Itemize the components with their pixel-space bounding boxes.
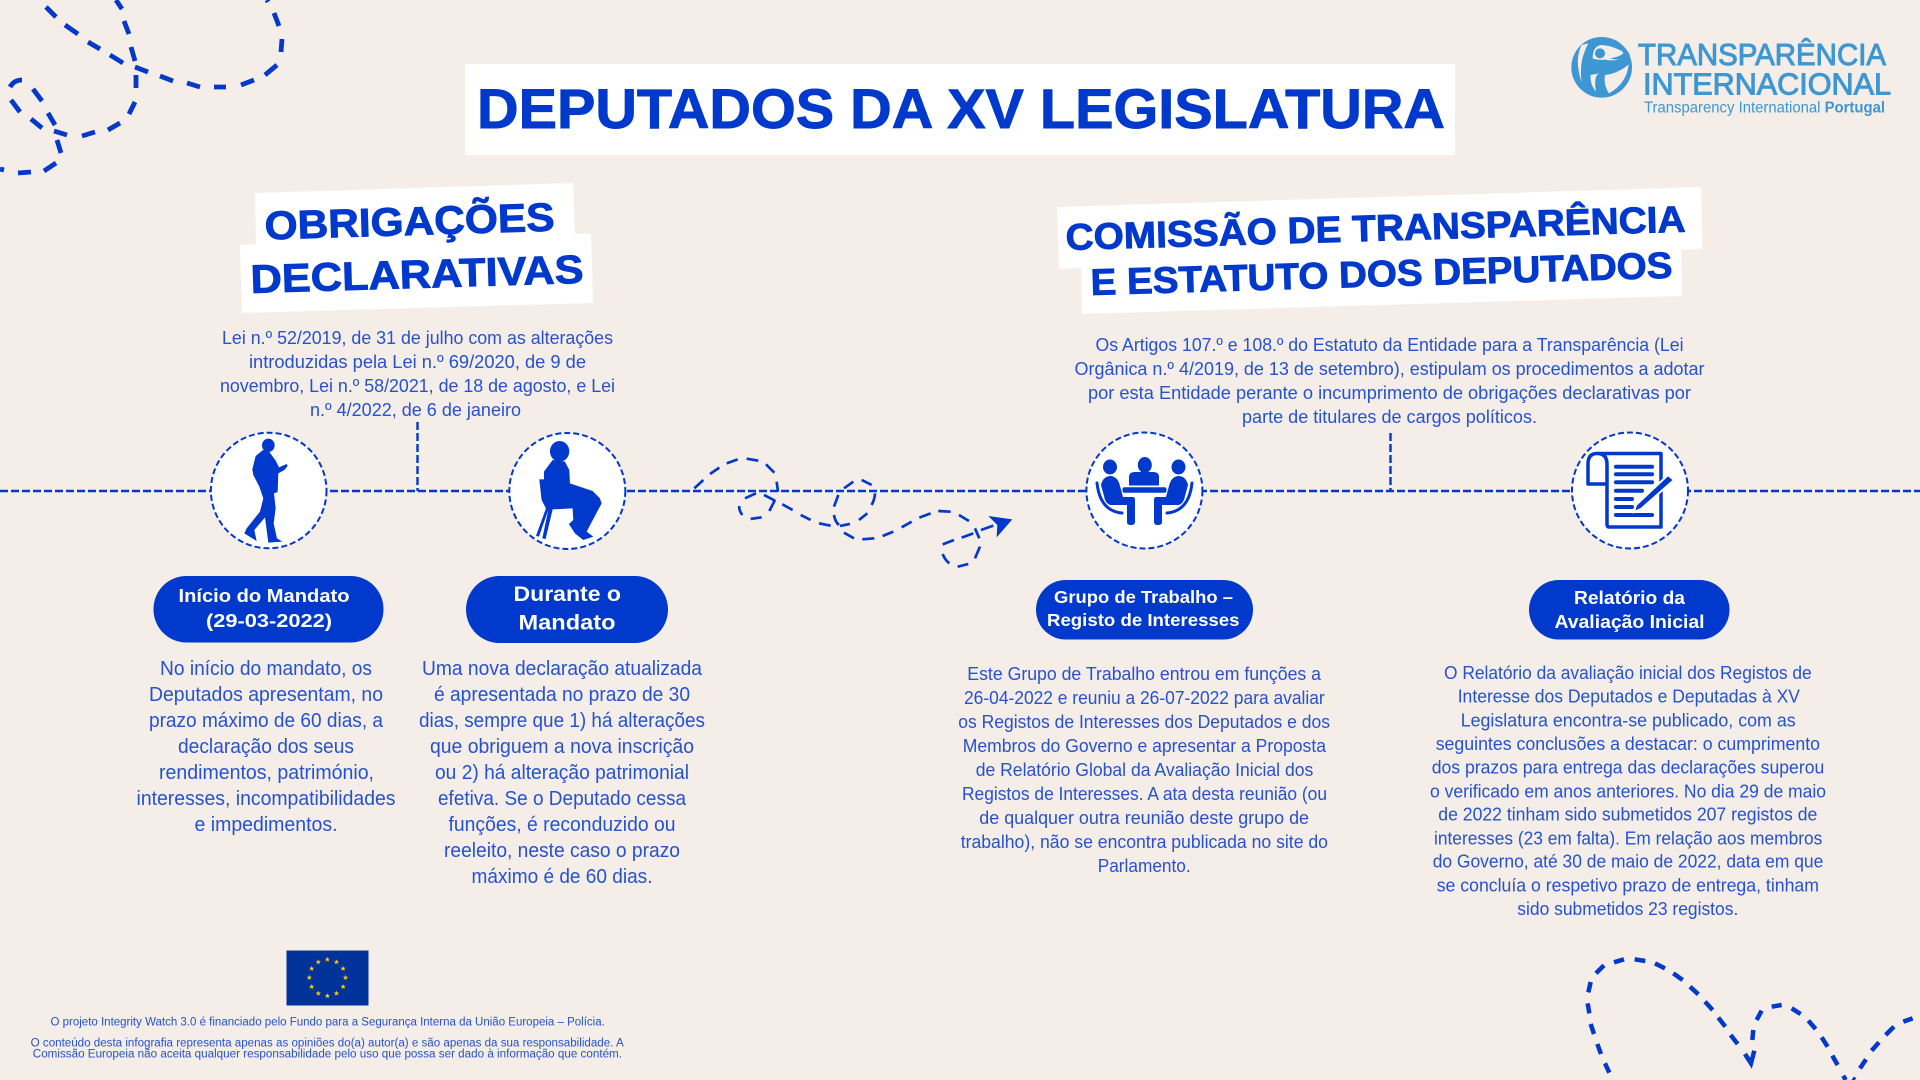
text: relatório da avaliação inicial: se concluía o respetivo prazo de entrega, tinham [1437,874,1819,895]
panel: comissão de transparência [958,187,1826,919]
text: grupo de trabalho: 26-04-2022 e reuniu a 26-07-2022 para avaliar [964,687,1325,708]
text: relatório da avaliação inicial: sido submetidos 23 registos. [1517,898,1738,919]
text: durante o mandato: é apresentada no prazo de 30 [434,683,690,706]
text: artigos do estatuto: Orgânica n.º 4/2019, de 13 de setembro), estipulam os procedimentos a adotar [1074,358,1704,379]
logo: Transparência Internacional: INTERNACIONAL [1643,66,1891,102]
text: grupo de trabalho: os Registos de Interesses dos Deputados e dos [958,711,1330,732]
text: relatório da avaliação inicial: interesses (23 em falta). Em relação aos membros [1434,827,1822,848]
text: início do mandato: e impedimentos. [194,813,338,836]
text: grupo de trabalho: Este Grupo de Trabalho entrou em funções a [967,663,1322,684]
label: grupo de trabalho: Registo de Interesses [1047,610,1240,630]
heading: obrigações declarativas: DECLARATIVAS [250,248,584,302]
text: grupo de trabalho: Registos de Interesses. A ata desta reunião (ou [962,783,1327,804]
label: durante o mandato: Mandato [518,610,616,634]
text: durante o mandato: ou 2) há alteração patrimonial [435,761,689,784]
text: grupo de trabalho: de Relatório Global da Avaliação Inicial dos [976,759,1313,780]
label: grupo de trabalho [1036,580,1253,640]
text: início do mandato: Deputados apresentam, no [149,683,383,706]
text: início do mandato: prazo máximo de 60 dias, a [149,709,384,732]
label: durante o mandato [466,576,668,643]
text: relatório da avaliação inicial: de 2022 tinham sido submetidos 207 registos de [1438,804,1817,825]
text: início do mandato: rendimentos, património, [159,761,374,784]
decoration: dashed loops bottom right [1588,959,1913,1080]
text: relatório da avaliação inicial: seguintes conclusões a destacar: o cumprimento [1436,733,1820,754]
title: DEPUTADOS DA XV LEGISLATURA [477,77,1445,140]
label: durante o mandato: Durante o [514,582,621,606]
label: início do mandato: (29-03-2022) [206,610,332,631]
text: artigos do estatuto: Os Artigos 107.º e 108.º do Estatuto da Entidade para a Transparência (Lei [1096,334,1684,355]
decoration: dashed loops top left [0,0,282,173]
text: grupo de trabalho: Parlamento. [1098,855,1191,876]
text: relatório da avaliação inicial: do Governo, até 30 de maio de 2022, data em que [1433,851,1823,872]
heading: comissão de transparência e estatuto dos deputados: COMISSÃO DE TRANSPARÊNCIA [1065,198,1686,258]
text: base legal [220,327,615,420]
timeline: horizontal dashed line and connectors [0,422,1920,491]
text: artigos do estatuto [1074,334,1704,427]
text: grupo de trabalho: Membros do Governo e apresentar a Proposta [963,735,1327,756]
heading: comissão de transparência e estatuto dos deputados: E ESTATUTO DOS DEPUTADOS [1090,245,1673,303]
text: funding disclaimer: O projeto Integrity Watch 3.0 é financiado pelo Fundo para a Segurança Interna da União Europeia – Polícia. [50,1017,605,1029]
label: relatório da avaliação inicial: Relatório da [1574,588,1686,608]
logo: Transparência Internacional [1571,37,1891,117]
text: base legal: novembro, Lei n.º 58/2021, de 18 de agosto, e Lei [220,375,615,396]
text: início do mandato [136,657,396,836]
text: durante o mandato: máximo é de 60 dias. [472,865,652,888]
icon: meeting table in circle [1086,432,1202,548]
logo: Transparência Internacional: Transparency International Portugal [1644,100,1885,116]
text: relatório da avaliação inicial: Interesse dos Deputados e Deputadas à XV [1458,686,1801,707]
title [465,64,1455,155]
text: base legal: introduzidas pela Lei n.º 69/2020, de 9 de [249,351,586,372]
text: durante o mandato: dias, sempre que 1) há alterações [419,709,705,732]
text: funding disclaimer: O conteúdo desta infografia representa apenas as opiniões do(a) autor(a) e são apenas da sua responsabilidade. A [31,1037,624,1049]
text: grupo de trabalho: trabalho), não se encontra publicada no site do [961,831,1328,852]
text: durante o mandato [419,657,705,888]
text: base legal: Lei n.º 52/2019, de 31 de julho com as alterações [222,327,613,348]
text: base legal: n.º 4/2022, de 6 de janeiro [310,399,521,420]
icon: globe with figure [1571,37,1632,98]
text: relatório da avaliação inicial [1430,662,1826,919]
heading: comissão de transparência e estatuto dos deputados [1057,187,1702,314]
heading: obrigações declarativas: OBRIGAÇÕES [264,194,555,248]
arrow: dashed looping arrow [694,459,1012,567]
label: início do mandato [154,576,384,642]
logo: Transparência Internacional: TRANSPARÊNCIA [1638,37,1886,72]
label: relatório da avaliação inicial [1529,580,1730,640]
text: durante o mandato: Uma nova declaração atualizada [422,657,703,680]
text: funding disclaimer: Comissão Europeia não aceita qualquer responsabilidade pelo uso que possa ser dado à informação que contém. [33,1048,622,1060]
panel: obrigações declarativas [136,183,705,888]
text: durante o mandato: que obriguem a nova inscrição [430,735,694,758]
icon: EU flag [286,950,368,1006]
text: relatório da avaliação inicial: O Relatório da avaliação inicial dos Registos de [1444,662,1812,683]
icon: document and pen in circle [1572,432,1688,548]
icon: walking person in circle [211,433,326,548]
text: relatório da avaliação inicial: Legislatura encontra-se publicado, com as [1461,709,1796,730]
text: grupo de trabalho: de qualquer outra reunião deste grupo de [979,807,1309,828]
text: início do mandato: interesses, incompatibilidades [136,787,396,810]
text: início do mandato: No início do mandato, os [160,657,372,680]
text: durante o mandato: efetiva. Se o Deputado cessa [438,787,687,810]
text: durante o mandato: reeleito, neste caso o prazo [444,839,680,862]
text: início do mandato: declaração dos seus [178,735,354,758]
text: durante o mandato: funções, é reconduzido ou [448,813,676,836]
label: início do mandato: Início do Mandato [178,585,350,606]
label: grupo de trabalho: Grupo de Trabalho – [1054,587,1233,607]
text: artigos do estatuto: por esta Entidade perante o incumprimento de obrigações declarativas por [1088,382,1691,403]
text: artigos do estatuto: parte de titulares de cargos políticos. [1242,406,1537,427]
icon: seated person in circle [509,433,625,549]
text: relatório da avaliação inicial: o verificado em anos anteriores. No dia 29 de maio [1430,780,1826,801]
text: grupo de trabalho [958,663,1330,876]
text: relatório da avaliação inicial: dos prazos para entrega das declarações superou [1432,757,1824,778]
label: relatório da avaliação inicial: Avaliação Inicial [1554,612,1704,632]
text: funding disclaimer [31,1017,624,1060]
heading: obrigações declarativas [240,183,593,313]
